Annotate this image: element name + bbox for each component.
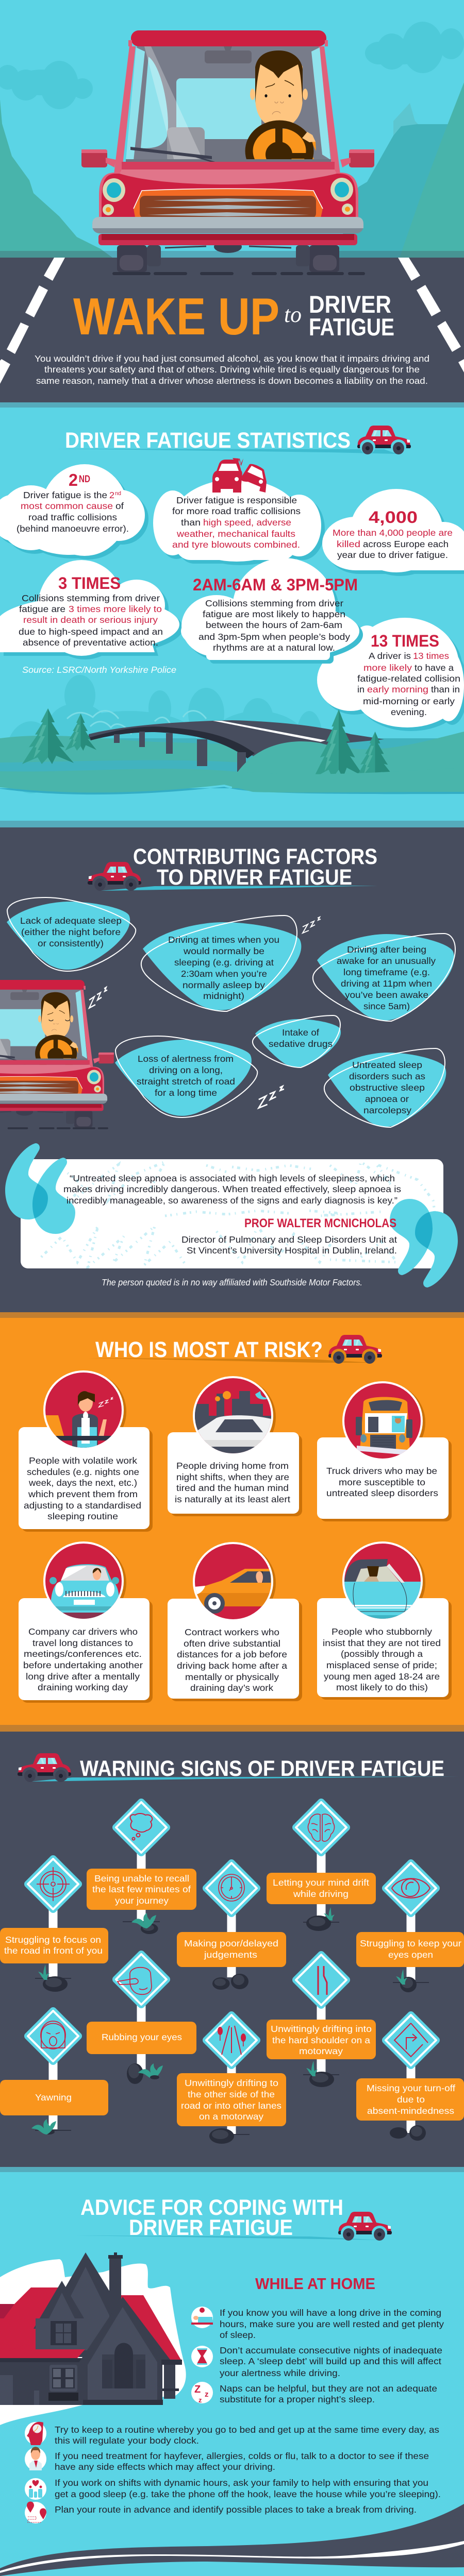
icon: zzz centre: [259, 1086, 284, 1108]
stat: 2nd most common cause: ND: [79, 474, 90, 485]
factor: untreated sleep disorders: [324, 1048, 446, 1127]
factor: awake unusually long: awake for an unusually: [337, 956, 436, 966]
panel: expert quote: PROF WALTER MCNICHOLAS: [244, 1216, 396, 1230]
card: contract workers: Contract workers who: [185, 1627, 279, 1637]
card: company car drivers: before undertaking another: [23, 1660, 143, 1670]
card: company car drivers: draining working day: [38, 1682, 128, 1692]
factor: awake unusually long: [313, 934, 455, 1021]
stat: 2am-6am and 3pm-5pm: [181, 558, 363, 664]
tip: routine: this will regulate your body clock.: [55, 2435, 199, 2446]
illustration: house on white blob: [0, 2252, 186, 2425]
sign: other side of road: the other side of the: [188, 2089, 275, 2099]
icon: opening quotation marks: [5, 1143, 75, 1234]
stat: 4,000 killed: across Europe each: [363, 539, 449, 549]
panel: header scene: [0, 22, 464, 384]
stat: more collisions than other causes: weather, mechanical faults: [176, 529, 295, 539]
icon: crashed cars: [212, 458, 267, 493]
tip: treatment side effects: [25, 2447, 429, 2472]
road edge dashes: [0, 258, 464, 384]
factor: awake unusually long: long timeframe (e.g.: [343, 967, 430, 977]
stat: 13 times: than in: [431, 684, 460, 694]
sign: other side of road: [177, 2015, 286, 2144]
stat: more collisions than other causes: [153, 458, 325, 565]
icon: closing quotation marks: [390, 1199, 458, 1287]
icon: thought bubble: [130, 1814, 152, 1840]
tip: naps: Naps can be helpful, but they are not an adequate: [220, 2383, 437, 2394]
stat: 2am-6am and 3pm-5pm: 2AM-6AM & 3PM-5PM: [193, 575, 358, 594]
factor: loss of alertness: for a long time: [155, 1088, 217, 1098]
sign: keep eyes open: [356, 1863, 464, 1992]
card: stubborn drivers: misplaced sense of pride;: [326, 1660, 437, 1670]
stat: 4,000 killed: [322, 489, 464, 576]
factor: driving at sleeping times: normally asleep by: [183, 980, 265, 990]
tip: rest before a long drive: If you know you will have a long drive in the coming: [220, 2308, 441, 2318]
sign: missing turn-off: absent-mindedness: [367, 2106, 454, 2116]
card: stubborn drivers: young men aged 18-24 are: [324, 1671, 440, 1682]
heading: Contributing Factors to Driver Fatigue: CONTRIBUTING FACTORS: [133, 844, 377, 869]
panel: while at home tips: [25, 2307, 444, 2523]
panel: contributing factor bubbles: [7, 897, 455, 1127]
card: stubborn drivers: People who stubbornly: [332, 1626, 432, 1637]
icon: zzz: [191, 2382, 213, 2404]
card: volatile work schedules: sleeping routine: [47, 1511, 118, 1521]
panel: risk groups: [19, 1371, 452, 1703]
stat: 3 times: absence of preventative action.: [23, 637, 158, 648]
title: Wake Up to Driver Fatigue: FATIGUE: [309, 313, 394, 341]
factor: loss of alertness: [115, 1036, 257, 1117]
card: volatile work schedules: [19, 1371, 153, 1532]
sign: poor judgements: Making poor/delayed: [184, 1938, 278, 1948]
heading: Advice for Coping with Driver Fatigue: ADVICE FOR COPING WITH: [80, 2195, 343, 2220]
tip: sleep debt: sleep. A ‘sleep debt’ will build up and this will affect: [220, 2356, 441, 2366]
card: contract workers: distances for a job before: [177, 1649, 287, 1659]
factor: awake unusually long: driving at 11pm when: [341, 978, 432, 989]
card: night shift drivers: is naturally at its least alert: [175, 1494, 290, 1504]
icon: narrowing road: [318, 1966, 327, 1995]
tip: family support: [25, 2478, 441, 2500]
stat: 2am-6am and 3pm-5pm: fatigue are most likely to happen: [203, 609, 345, 619]
stat: 13 times: 13 TIMES: [371, 632, 439, 650]
card: company car drivers: long drive after a mentally: [26, 1671, 140, 1682]
factor: awake unusually long: since 5am): [363, 1001, 410, 1011]
stat: 13 times: A driver is: [369, 651, 411, 661]
icon: doctor: [25, 2447, 46, 2470]
illustration: city and white car at night: [195, 1391, 271, 1453]
icon: stopwatch dial: [219, 1874, 244, 1901]
factor: untreated sleep disorders: obstructive sleep: [350, 1082, 425, 1093]
illustration: tired driver in red car: [81, 30, 374, 275]
stat: more collisions than other causes: and tyre blowouts combined.: [172, 539, 300, 550]
factor: untreated sleep disorders: disorders such as: [349, 1071, 425, 1081]
factor: loss of alertness: Loss of alertness from: [138, 1054, 234, 1064]
factor: loss of alertness: straight stretch of road: [137, 1076, 235, 1087]
icon: target: [37, 1867, 70, 1901]
heading: Advice for Coping with Driver Fatigue: DRIVER FATIGUE: [129, 2215, 293, 2240]
factor: driving at sleeping times: midnight): [203, 991, 244, 1001]
factor: untreated sleep disorders: narcolepsy: [363, 1105, 411, 1115]
stat: 4,000 killed: 4,000: [369, 508, 418, 527]
stat: 2nd most common cause: 2: [109, 490, 114, 500]
factor: sedative drugs: [253, 1015, 341, 1067]
tip: sleep debt: your alertness while driving.: [220, 2368, 340, 2378]
card: company car drivers: Company car drivers who: [28, 1626, 138, 1637]
stat: 2nd most common cause: of: [115, 501, 124, 511]
icon: head with clock: [25, 2422, 46, 2445]
illustration: blue mini: [49, 1564, 119, 1619]
illustration: bridge landscape: [0, 675, 464, 794]
factor: lack of sleep: Lack of adequate sleep: [20, 916, 122, 926]
sign: missing turn-off: due to: [397, 2094, 425, 2105]
clouds and hills: [0, 22, 464, 258]
intro paragraph: same reason, namely that a driver whose alertness is down becomes a liability on the road.: [36, 376, 428, 386]
heading: While at Home: WHILE AT HOME: [255, 2275, 375, 2293]
card: company car drivers: meetings/conferences etc.: [24, 1649, 142, 1659]
icon: zzz: z: [205, 2390, 208, 2399]
sign: keep eyes open: eyes open: [388, 1950, 433, 1960]
stat: 3 times: due to high-speed impact and an: [19, 626, 163, 637]
tip: family support: get a good sleep (e.g. take the phone off the hook, leave the house while you’re sleeping).: [55, 2489, 441, 2499]
factor: driving at sleeping times: Driving at times when you: [168, 935, 279, 945]
card: contract workers: mentally or physically: [185, 1672, 279, 1682]
title: Wake Up to Driver Fatigue: to: [284, 302, 302, 327]
tip: naps: [191, 2382, 437, 2404]
tip: sleep debt: [191, 2345, 442, 2378]
stat: 4,000 killed: More than 4,000 people are: [333, 528, 453, 538]
heading: Driver Fatigue Statistics: DRIVER FATIGUE STATISTICS: [65, 428, 351, 453]
card: stubborn drivers: most likely to do this): [336, 1682, 428, 1692]
factor: driving at sleeping times: sleeping (e.g. driving at: [174, 957, 274, 968]
panel: expert quote: “Untreated sleep apnoea is associated with high levels of sleepiness, which: [70, 1173, 395, 1183]
card: truck drivers: more susceptible to: [339, 1477, 425, 1487]
sign: other side of road: road or into other lanes: [181, 2100, 281, 2111]
disclaimer: The person quoted is in no way affiliated with Southside Motor Factors.: [102, 1277, 362, 1287]
sign: unable to recall: your journey: [115, 1895, 169, 1906]
stat: 13 times: early morning: [367, 684, 428, 694]
factor: sedative drugs: Intake of: [282, 1027, 319, 1038]
stat: more collisions than other causes: than: [181, 517, 201, 528]
stat: 3 times: 3 times more likely to: [69, 604, 162, 614]
panel: expert quote: St Vincent’s University Hospital in Dublin, Ireland.: [187, 1245, 397, 1256]
card: volatile work schedules: People with volatile work: [29, 1455, 137, 1466]
stat: 2am-6am and 3pm-5pm: and 3pm-5pm when people’s body: [198, 632, 350, 642]
card: night shift drivers: tired and the human mind: [176, 1483, 289, 1493]
stat: 13 times: to have a: [415, 663, 454, 673]
sign: hard shoulder drift: [267, 1955, 376, 2087]
panel: statistics clouds: [0, 458, 464, 731]
stat: 13 times: [317, 618, 464, 731]
tip: rest before a long drive: of sleep.: [220, 2330, 256, 2340]
sign: unable to recall: the last few minutes of: [92, 1884, 191, 1894]
card: truck drivers: untreated sleep disorders: [326, 1488, 438, 1498]
factor: loss of alertness: driving on a long,: [149, 1065, 223, 1075]
stat: 13 times: evening.: [391, 707, 427, 717]
icon: rubbing eyes face: [118, 1968, 152, 1994]
card: company car drivers: travel long distances to: [32, 1638, 133, 1648]
card: stubborn drivers: (possibly through a: [341, 1649, 423, 1659]
intro paragraph: threatens your safety and that of others. Driving while tired is equally dangerous for the: [44, 364, 420, 375]
intro paragraph: You wouldn’t drive if you had just consumed alcohol, as you know that it impairs driving and: [35, 353, 429, 364]
stat: 3 times: 3 TIMES: [58, 574, 121, 592]
sign: hard shoulder drift: the hard shoulder on a: [272, 2035, 370, 2045]
card: stubborn drivers: [317, 1543, 452, 1700]
factor: untreated sleep disorders: apnoea or: [365, 1094, 409, 1104]
tip: treatment side effects: If you need treatment for hayfever, allergies, colds or flu, talk to a doctor to see if these: [55, 2451, 429, 2461]
factor: awake unusually long: Driving after being: [347, 944, 426, 955]
sign: unable to recall: [87, 1802, 196, 1934]
illustration: orange car side view: [194, 1569, 273, 1614]
card: contract workers: often drive substantial: [184, 1638, 280, 1649]
panel: expert quote: [5, 1143, 458, 1287]
sign: other side of road: on a motorway: [199, 2111, 263, 2122]
card: volatile work schedules: adjusting to a standardised: [24, 1500, 141, 1511]
sign: struggling to focus: the road in front of you: [4, 1945, 103, 1956]
card: night shift drivers: [168, 1377, 302, 1516]
sign: mind drift: [267, 1802, 376, 1931]
stat: 3 times: Collisions stemming from driver: [22, 593, 160, 603]
card: truck drivers: Truck drivers who may be: [326, 1466, 437, 1476]
tip: rest before a long drive: [191, 2307, 444, 2340]
stat: 2nd most common cause: most common cause: [21, 501, 113, 511]
card: contract workers: driving back home after a: [177, 1660, 287, 1671]
stat: 2nd most common cause: 2: [69, 470, 78, 489]
sign: yawning: [0, 2011, 108, 2134]
factor: driving at sleeping times: would normally be: [183, 946, 264, 956]
stat: 13 times: more likely: [363, 663, 412, 673]
sign: mind drift: Letting your mind drift: [273, 1877, 369, 1888]
icon: eye: [392, 1878, 430, 1898]
sign: struggling to focus: Struggling to focus on: [5, 1935, 101, 1945]
tip: sleep debt: Don’t accumulate consecutive nights of inadequate: [220, 2345, 442, 2355]
sign: rubbing eyes: Rubbing your eyes: [102, 2032, 182, 2042]
card: night shift drivers: night shifts, when they are: [176, 1472, 289, 1482]
sign: unable to recall: Being unable to recall: [94, 1873, 189, 1884]
card: night shift drivers: People driving home from: [176, 1461, 289, 1471]
stat: 13 times: fatigue-related collision: [357, 673, 460, 684]
title: Wake Up to Driver Fatigue: DRIVER: [309, 291, 391, 318]
illustration: road swoosh: [0, 2504, 464, 2576]
panel: expert quote: makes driving incredibly dangerous. When treated effectively, sleep apnoea is: [63, 1184, 401, 1194]
card: volatile work schedules: week, days the next, etc.): [28, 1478, 137, 1488]
sign: struggling to focus: [0, 1859, 108, 1992]
card: volatile work schedules: which prevent them from: [28, 1489, 138, 1499]
source note: Source: LSRC/North Yorkshire Police: [22, 665, 176, 675]
sign: missing turn-off: [356, 2015, 464, 2141]
stat: 2am-6am and 3pm-5pm: between the hours of 2am-6am: [206, 620, 342, 630]
stat: 2nd most common cause: nd: [115, 490, 121, 497]
stat: more collisions than other causes: high speed, adverse: [203, 517, 291, 528]
stat: 2nd most common cause: [0, 464, 148, 560]
title: Wake Up to Driver Fatigue: WAKE UP: [73, 288, 279, 346]
factor: driving at sleeping times: 2:30am when you’re: [181, 969, 267, 979]
icon: yawning face: [41, 2021, 65, 2049]
card: stubborn drivers: insist that they are not tired: [323, 1638, 441, 1648]
illustration: orange truck: [356, 1397, 412, 1455]
icon: hourglass: [191, 2346, 213, 2367]
stat: 3 times: fatigue are: [19, 604, 65, 614]
icon: zzz: Z: [194, 2384, 201, 2395]
intro paragraph: [35, 353, 429, 386]
tip: naps: substitute for a proper night’s sleep.: [220, 2394, 375, 2404]
tip: rest before a long drive: hours, make sure you are well rested and get plenty: [220, 2319, 444, 2329]
icon: zzz beside driver: [89, 987, 107, 1008]
panel: expert quote: incredibly manageable, so awareness of the signs and early diagnosis is key.”: [67, 1195, 397, 1206]
card: company car drivers: [19, 1543, 153, 1703]
factor: lack of sleep: (either the night before: [21, 927, 121, 937]
illustration: sleeping driver in car: [0, 980, 114, 1129]
card: contract workers: [168, 1543, 302, 1701]
icon: turn arrow: [394, 2023, 428, 2057]
sign: poor judgements: judgements: [204, 1950, 257, 1960]
sign: missing turn-off: Missing your turn-off: [367, 2083, 455, 2093]
stat: 2am-6am and 3pm-5pm: Collisions stemming from driver: [205, 598, 343, 608]
stat: more collisions than other causes: Driver fatigue is responsible: [176, 495, 297, 505]
stat: 2nd most common cause: (behind manoeuvre error).: [16, 523, 129, 534]
tip: routine: [25, 2422, 439, 2446]
stat: 13 times: 13 times: [413, 651, 449, 661]
tip: family support: If you work on shifts with dynamic hours, ask your family to help with ensuring that you: [55, 2478, 428, 2488]
heading: Contributing Factors to Driver Fatigue: [88, 844, 377, 891]
factor: lack of sleep: or consistently): [38, 938, 104, 948]
stat: 4,000 killed: killed: [337, 539, 360, 549]
factor: untreated sleep disorders: Untreated sleep: [352, 1060, 422, 1070]
sign: hard shoulder drift: motorway: [299, 2046, 343, 2056]
stat: 4,000 killed: year due to driver fatigue.: [337, 550, 448, 560]
stat: 2nd most common cause: Driver fatigue is the: [23, 490, 107, 500]
icon: family with heart: [25, 2478, 46, 2500]
illustration: tired office worker: [45, 1391, 111, 1448]
sign: poor judgements: [177, 1863, 286, 1990]
icon: bed: [191, 2307, 213, 2328]
icon: zzz: z: [198, 2396, 202, 2404]
sign: hard shoulder drift: Unwittingly drifting into: [271, 2024, 372, 2034]
tip: routine: Try to keep to a routine whereby you go to bed and get up at the same time every day, as: [55, 2425, 439, 2435]
stat: 3 times: [0, 560, 183, 659]
icon: brain: [308, 1814, 335, 1841]
tip: treatment side effects: have any side effects which may affect your driving.: [55, 2462, 275, 2472]
sign: keep eyes open: Struggling to keep your: [360, 1938, 461, 1948]
card: truck drivers: [317, 1382, 452, 1521]
heading: Who Is Most At Risk?: WHO IS MOST AT RISK?: [95, 1337, 323, 1362]
stat: 2am-6am and 3pm-5pm: rhythms are at a natural low.: [213, 642, 335, 653]
factor: driving at sleeping times: [141, 916, 301, 1011]
sign: other side of road: Unwittingly drifting to: [185, 2078, 278, 2088]
tip: plan your route: Plan your route in advance and identify possible places to take a break from driving.: [55, 2504, 417, 2515]
heading: Contributing Factors to Driver Fatigue: TO DRIVER FATIGUE: [157, 865, 352, 890]
stat: 13 times: mid-morning or early: [363, 696, 455, 706]
sign: yawning: Yawning: [35, 2092, 72, 2103]
factor: awake unusually long: you’ve been awake: [345, 990, 428, 1000]
heading: Advice for Coping with Driver Fatigue: [75, 2195, 392, 2241]
illustration: blue convertible: [344, 1559, 421, 1619]
panel: warning signs: [0, 1802, 464, 2144]
stat: more collisions than other causes: for more road traffic collisions: [172, 506, 301, 516]
factor: lack of sleep: [7, 897, 136, 971]
stat: 13 times: in: [357, 684, 364, 694]
panel: expert quote: Director of Pulmonary and Sleep Disorders Unit at: [181, 1234, 397, 1245]
factor: sedative drugs: sedative drugs: [269, 1039, 333, 1049]
sign: rubbing eyes: [87, 1954, 196, 2084]
card: volatile work schedules: schedules (e.g. nights one: [27, 1467, 139, 1477]
tip: plan your route: [25, 2502, 417, 2523]
stat: 3 times: result in death or serious injury: [23, 615, 158, 625]
icon: road with trees: [222, 2026, 241, 2055]
stat: 2nd most common cause: road traffic collisions: [28, 512, 117, 522]
icon: zzz: [303, 917, 321, 933]
sign: mind drift: while driving: [293, 1889, 349, 1899]
card: contract workers: draining day’s work: [190, 1683, 273, 1693]
icon: map pins: [25, 2502, 46, 2523]
